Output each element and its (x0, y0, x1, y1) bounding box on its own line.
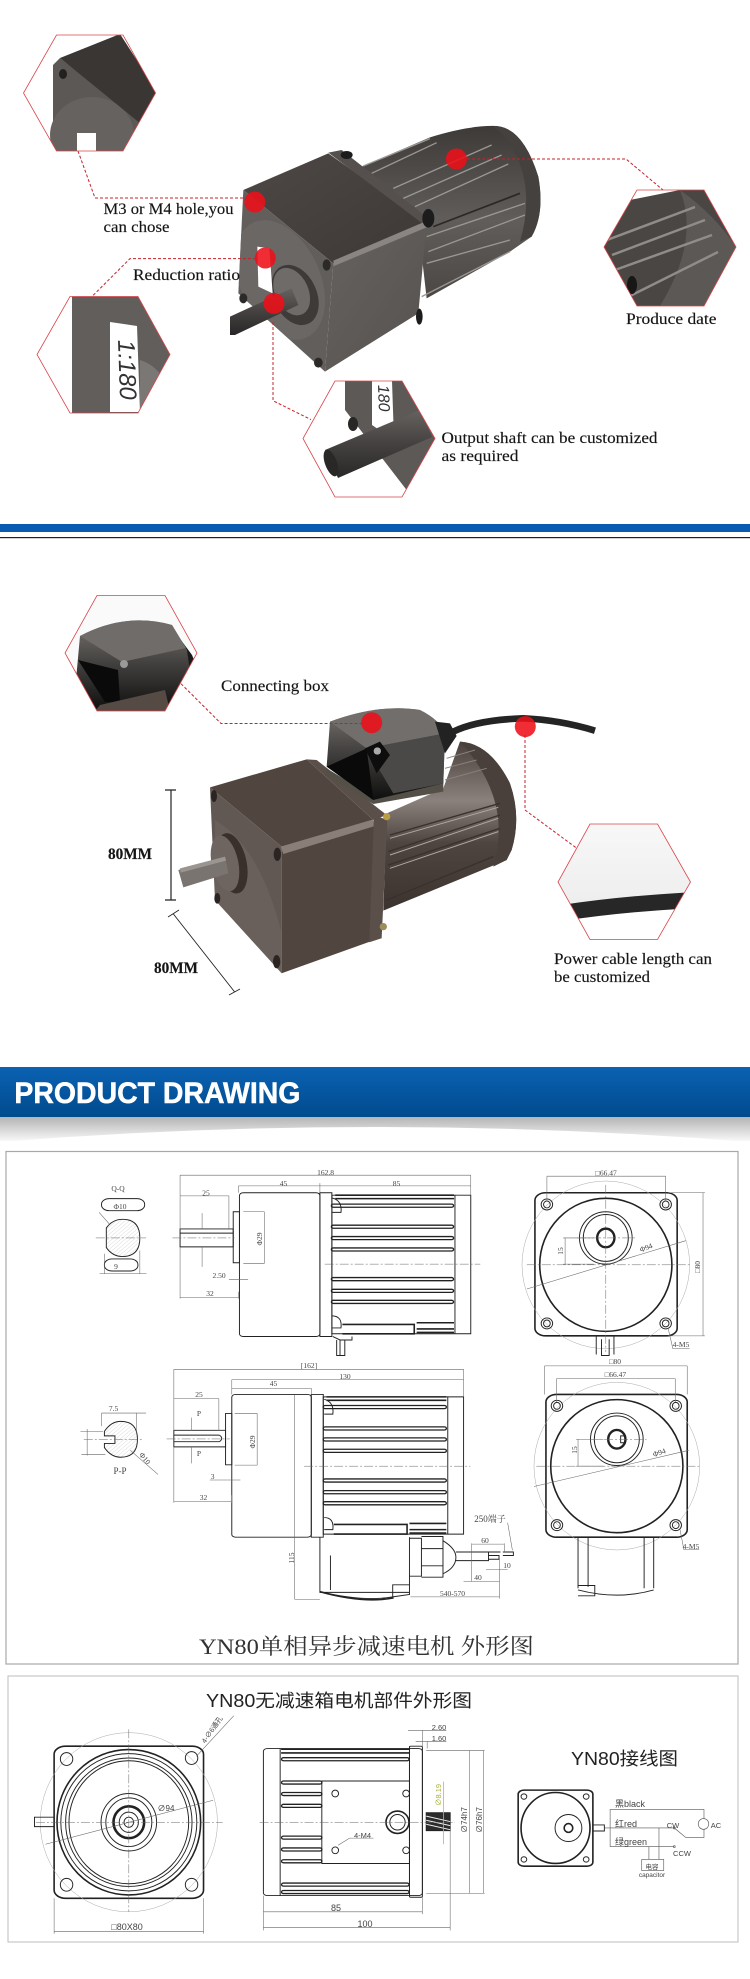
side view (260, 1730, 485, 1930)
labels: outline dimensions: 7.5 (109, 1404, 118, 1413)
text: M3 or M4 hole: M3 or M4 hole,you (104, 201, 234, 218)
labels: outline dimensions: 3 (211, 1472, 215, 1481)
labels: outline dimensions: 15 (556, 1247, 565, 1255)
labels: outline dimensions: 130 (339, 1372, 351, 1381)
labels: outline dimensions: 40 (474, 1573, 482, 1582)
labels: parts dimensions: 100 (357, 1919, 373, 1929)
labels: outline dimensions: 15 (570, 1446, 579, 1454)
text: be customized: be customized (554, 969, 650, 986)
text: reduction ratio: Reduction ratio (133, 267, 240, 284)
photo: motor with connecting box (178, 708, 595, 973)
text: connecting box: Connecting box (221, 678, 329, 695)
labels: parts dimensions: 红red (615, 1818, 637, 1829)
labels: parts dimensions: capacitor (639, 1872, 666, 1879)
labels: outline dimensions: 32 (206, 1289, 214, 1298)
callout line: reduction ratio (92, 259, 256, 296)
divider: blue band (0, 524, 750, 532)
labels: parts dimensions: ∅8.19 (434, 1784, 443, 1806)
labels: outline dimensions: [162] (301, 1361, 317, 1370)
hexagon: power cable detail (555, 822, 695, 944)
panel: gear motor callouts (24, 34, 736, 497)
labels: parts dimensions: 绿green (615, 1836, 647, 1847)
text: can chose: can chose (104, 219, 170, 236)
drawing: line work (34, 1716, 709, 1934)
labels: outline dimensions: 4-M5 (683, 1542, 700, 1551)
labels: outline dimensions: Φ94 (638, 1241, 654, 1254)
labels: outline dimensions: P (197, 1409, 201, 1418)
labels: outline dimensions: □66.47 (605, 1370, 626, 1379)
labels: outline dimensions: 25 (195, 1390, 203, 1399)
labels: parts dimensions: 85 (331, 1903, 341, 1913)
dimension: vertical 80MM: 80MM (108, 846, 152, 863)
hexagon: output shaft detail (303, 381, 438, 497)
labels: outline dimensions (109, 1168, 702, 1598)
labels: parts dimensions: 电容 (646, 1862, 659, 1871)
labels: outline dimensions: Φ29 (248, 1435, 257, 1448)
divider: dark rule (0, 537, 750, 538)
dimension: vertical 80MM (108, 790, 176, 900)
labels: outline dimensions: Φ10 (137, 1451, 153, 1466)
text: power cable: Power cable length can (554, 951, 712, 968)
labels: parts dimensions: ∅94 (158, 1804, 175, 1813)
labels: parts dimensions: 4-M4 (354, 1831, 371, 1840)
title: parts drawing: YN80无减速箱电机部件外形图 (206, 1691, 472, 1711)
front view lower (534, 1366, 700, 1596)
labels: parts dimensions: CCW (673, 1849, 692, 1858)
labels: parts dimensions: CW (667, 1821, 680, 1830)
wiring motor (518, 1790, 604, 1866)
labels: outline dimensions: Φ94 (652, 1446, 667, 1459)
hexagon: reduction ratio detail (37, 296, 172, 420)
labels: parts dimensions: 4-∅6通孔 (199, 1714, 225, 1745)
labels: outline dimensions: P (197, 1449, 201, 1458)
front view upper (522, 1176, 705, 1356)
text: as required: as required (442, 448, 518, 465)
panel: YN80 outline drawing (6, 1152, 738, 1664)
wiring schematic (604, 1809, 709, 1871)
labels: outline dimensions: Φ10 (114, 1202, 127, 1211)
labels: parts dimensions: 1.60 (432, 1734, 446, 1743)
label: 1:180: 1:180 (112, 339, 141, 401)
labels: outline dimensions: 115 (287, 1552, 296, 1563)
labels: outline dimensions: 9 (114, 1262, 118, 1271)
dimension: diagonal 80MM (154, 910, 240, 995)
title: outline drawing: YN80单相异步减速电机 外形图 (199, 1634, 534, 1659)
section P-P (80, 1413, 158, 1474)
labels: parts dimensions: AC (711, 1821, 722, 1830)
labels: outline dimensions: 10 (503, 1561, 511, 1570)
section Q-Q (96, 1199, 147, 1274)
labels: outline dimensions: 540-570 (440, 1589, 465, 1598)
labels: outline dimensions: 4-M5 (673, 1340, 690, 1349)
text: output shaft: Output shaft can be customized (442, 430, 658, 447)
heading text: PRODUCT DRAWING (14, 1077, 300, 1110)
labels: parts dimensions: 2.60 (432, 1723, 446, 1732)
hexagon: produce date detail (604, 190, 736, 306)
labels: outline dimensions: 250端子 (474, 1513, 506, 1524)
label: shaft ratio sticker: 180 (374, 385, 392, 412)
side view upper (172, 1175, 480, 1356)
labels: outline dimensions: 45 (270, 1379, 278, 1388)
labels: outline dimensions: Φ29 (255, 1232, 264, 1245)
callout line: power cable (525, 735, 577, 848)
labels: outline dimensions: 85 (393, 1179, 400, 1188)
labels: outline dimensions: 60 (481, 1536, 489, 1545)
labels: outline dimensions: □80 (693, 1261, 702, 1273)
hexagon: connecting box detail (65, 595, 200, 715)
labels: outline dimensions: 2.50 (212, 1271, 226, 1280)
labels: outline dimensions: Q-Q (111, 1184, 125, 1193)
drawing: line work (80, 1175, 705, 1600)
labels: outline dimensions: P-P (113, 1466, 127, 1476)
hexagon: mounting hole detail (23, 34, 156, 152)
labels: parts dimensions: 黑black (615, 1799, 646, 1809)
red dots: marker points (244, 148, 467, 314)
title: wiring diagram: YN80接线图 (571, 1749, 678, 1769)
red dots: marker points (361, 712, 536, 737)
panel: YN80 parts and wiring (8, 1676, 738, 1942)
labels: outline dimensions: □66.47 (595, 1168, 617, 1178)
photo: gear motor (217, 126, 541, 372)
callout line: produce date (467, 159, 663, 190)
frame (8, 1676, 738, 1942)
labels: parts dimensions (111, 1714, 722, 1932)
dimension: diagonal 80MM: 80MM (154, 960, 198, 977)
callout line: M3 or M4 hole (78, 151, 244, 198)
front view (34, 1716, 234, 1934)
labels: outline dimensions: 45 (280, 1179, 288, 1188)
labels: parts dimensions: ∅76h7 (475, 1807, 484, 1833)
side view lower (167, 1369, 513, 1600)
section header: product drawing (0, 1067, 750, 1150)
callout line: output shaft (273, 322, 311, 420)
labels: outline dimensions: 162.8 (317, 1168, 334, 1177)
labels: outline dimensions: 25 (202, 1188, 210, 1198)
panel: terminal box motor (65, 595, 712, 995)
labels: outline dimensions: 32 (200, 1493, 208, 1502)
callout line: connecting box (181, 684, 364, 724)
text: produce date: Produce date (626, 311, 716, 328)
labels: parts dimensions: □80X80 (111, 1922, 143, 1932)
labels: outline dimensions: □80 (609, 1357, 621, 1366)
labels: parts dimensions: ∅74h7 (460, 1807, 469, 1833)
frame (6, 1152, 738, 1664)
